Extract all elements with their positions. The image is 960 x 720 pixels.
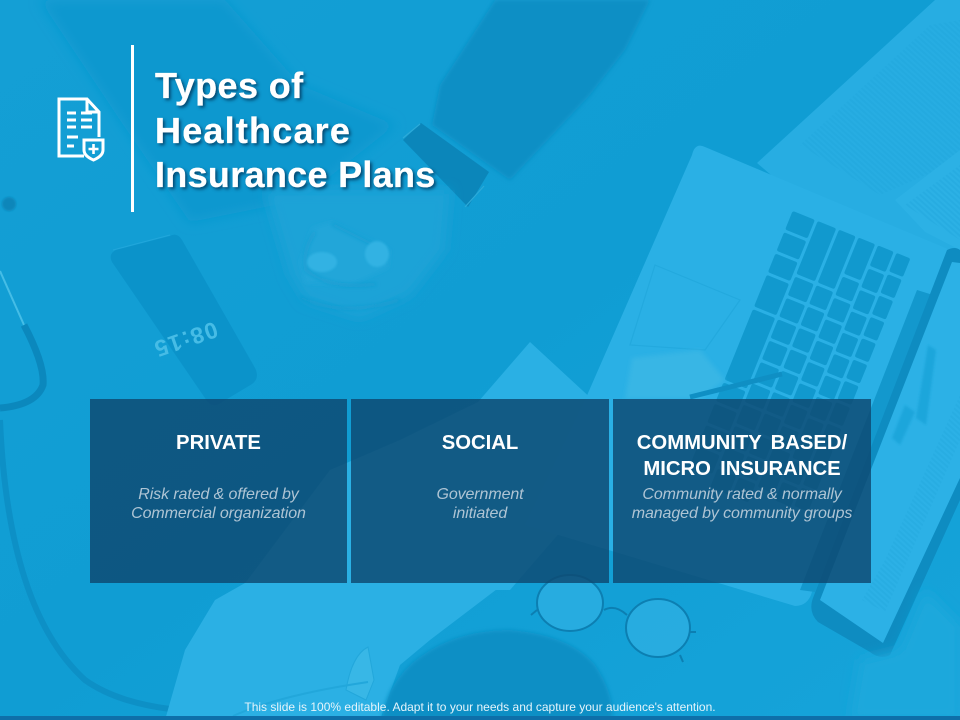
panel: social: [351, 399, 609, 583]
pen: [690, 374, 782, 397]
heading: community based: MICRO INSURANCE: [643, 458, 841, 480]
tablet: [811, 248, 960, 657]
heading: private: PRIVATE: [176, 432, 261, 454]
text: social description: [436, 486, 524, 522]
left sleeve: [40, 0, 395, 222]
panel: community based: [613, 399, 871, 583]
footer note: This slide is 100% editable. Adapt it to your needs and capture your audience's attention.: [244, 700, 716, 714]
vertical divider: [131, 45, 134, 212]
title: Types of: [155, 65, 304, 106]
title: Insurance Plans: [155, 154, 436, 195]
text: community description: Community rated & normally: [642, 486, 842, 503]
hair: [382, 630, 612, 720]
heading: community based: [637, 432, 848, 480]
collar: [233, 647, 374, 716]
text: community description: [632, 486, 852, 522]
wrist watch: [403, 123, 489, 207]
paper sheet: [240, 342, 640, 590]
text: private description: [131, 486, 306, 522]
phone: 08:15: [150, 316, 221, 363]
eyeglasses: [531, 575, 696, 662]
writing hand: [625, 350, 725, 399]
laptop: [525, 146, 955, 606]
heading: social: SOCIAL: [442, 432, 518, 454]
document pages: [757, 0, 960, 260]
text: community description: managed by community groups: [632, 505, 852, 522]
panel: private: [90, 399, 347, 583]
phone: [111, 235, 257, 405]
white coat: [165, 583, 505, 720]
title: [155, 65, 438, 195]
hand: [265, 190, 450, 318]
text: private description: Commercial organization: [131, 505, 306, 522]
icon: document with medical shield: [58, 98, 104, 162]
text: social description: initiated: [453, 505, 507, 522]
text: private description: Risk rated & offered by: [138, 486, 299, 503]
footer bar: [0, 716, 960, 720]
stethoscope: [0, 197, 222, 712]
title: Healthcare: [155, 110, 351, 150]
lower right hand: [850, 590, 960, 720]
right sleeve: [432, 0, 650, 180]
heading: community based: COMMUNITY BASED/: [637, 432, 847, 454]
laptop hinge strip: [800, 290, 933, 592]
text: social description: Government: [436, 486, 524, 503]
keyboard: [685, 211, 910, 525]
